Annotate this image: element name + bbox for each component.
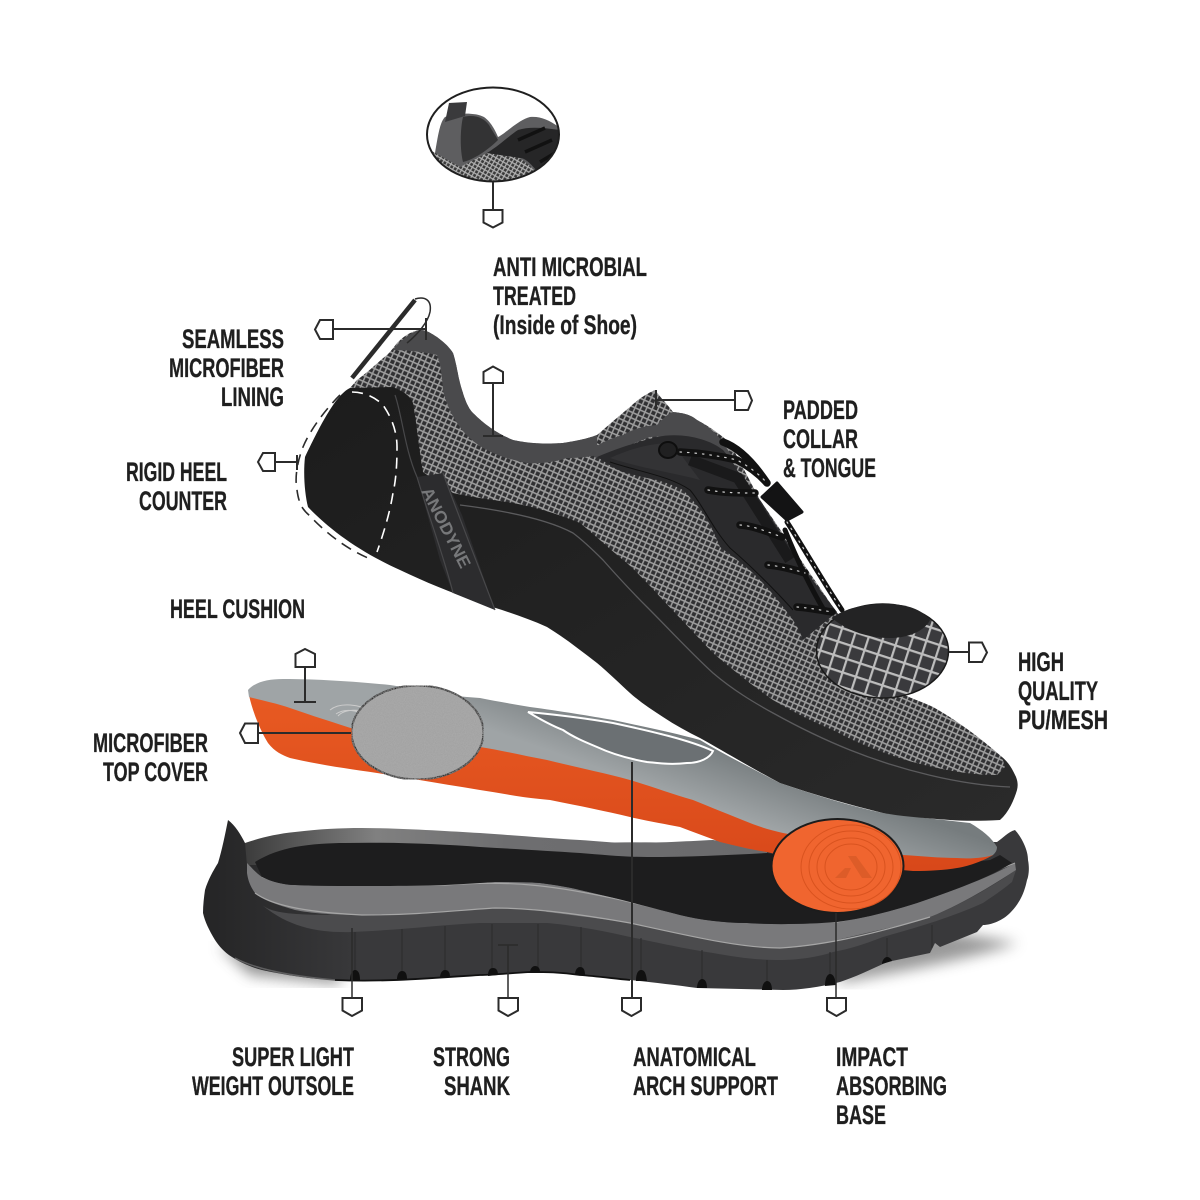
tread notches: [350, 957, 892, 990]
tag: heel cushion: [294, 649, 316, 702]
label: microfiber top cover: [93, 728, 208, 787]
tag: outsole: [342, 928, 362, 1016]
base logo: [835, 856, 872, 878]
inset heel tab: [445, 102, 467, 122]
label: seamless microfiber lining: [169, 324, 284, 412]
label: anatomical arch support: ARCH SUPPORT: [633, 1071, 778, 1101]
tongue: [590, 412, 737, 463]
inset black panel: [487, 128, 560, 170]
label: rigid heel counter: RIGID HEEL: [126, 457, 227, 487]
infographic: shoe anatomy: [94, 86, 1107, 1124]
textured rim: [262, 870, 1016, 960]
ripple rings: [801, 825, 901, 909]
tag: arch support: [622, 998, 641, 1016]
tag: impact base: [827, 913, 846, 1016]
arch support outline: [528, 712, 713, 764]
label: strong shank: SHANK: [444, 1071, 510, 1101]
label: high quality pu/mesh: PU/MESH: [1018, 705, 1108, 735]
label: super light weight outsole: WEIGHT OUTSOLE: [192, 1071, 354, 1101]
line: arch support: [631, 762, 633, 997]
inset mesh: [432, 151, 534, 180]
grey midsole band: [247, 863, 1016, 948]
label: seamless microfiber lining: LINING: [221, 382, 284, 412]
tag: seamless lining: [315, 318, 426, 340]
black cords: [680, 442, 832, 612]
outsole tread body: [203, 820, 1029, 990]
label: high quality pu/mesh: HIGH: [1018, 647, 1064, 677]
label: impact absorbing base: [836, 1042, 947, 1130]
tag: shank: [498, 945, 518, 1016]
shoe sole and rand: [304, 387, 1018, 821]
label: anti microbial: TREATED: [493, 281, 576, 311]
eyelet panel: [597, 435, 837, 640]
inset outer shoe: [435, 114, 558, 170]
label: anti microbial: (Inside of Shoe): [493, 310, 637, 340]
label: heel cushion: HEEL CUSHION: [170, 594, 305, 624]
outsole: [203, 820, 1029, 990]
eyelet panel shine: [610, 443, 700, 480]
label: impact absorbing base: ABSORBING: [836, 1071, 947, 1101]
insole orange side: [249, 695, 993, 871]
mesh upper: [350, 330, 1016, 800]
tread bottom edge: [335, 972, 630, 981]
mesh circle: [816, 604, 948, 698]
label: strong shank: [433, 1042, 510, 1101]
mesh circle leather: [832, 604, 930, 638]
outsole toe shadow: [835, 930, 1018, 984]
label: high quality pu/mesh: QUALITY: [1018, 676, 1098, 706]
label: strong shank: STRONG: [433, 1042, 510, 1072]
insole top surface: [248, 679, 997, 858]
label: microfiber top cover: MICROFIBER: [93, 728, 208, 758]
heel logo mark: [330, 705, 372, 716]
label: super light weight outsole: [192, 1042, 354, 1101]
reflective flecks: [680, 452, 842, 612]
label: anatomical arch support: [633, 1042, 778, 1101]
rand highlight: [460, 505, 1010, 787]
panel seam: [610, 462, 793, 610]
label: high quality pu/mesh: [1018, 647, 1108, 735]
label: impact absorbing base: IMPACT: [836, 1042, 908, 1072]
label: impact absorbing base: BASE: [836, 1100, 886, 1130]
tag: anti microbial lining: [483, 366, 503, 436]
label: seamless microfiber lining: SEAMLESS: [182, 324, 284, 354]
label: padded collar and tongue: & TONGUE: [783, 453, 876, 483]
callout: mesh detail: [816, 604, 948, 698]
lace toggle: [762, 483, 802, 520]
heel counter outline: [296, 392, 397, 558]
lace channel: [690, 460, 790, 560]
callout: anti microbial inset: [427, 88, 565, 190]
band highlight lines: [255, 863, 1015, 948]
logo strip: [417, 473, 495, 610]
eyelet: [659, 442, 677, 458]
label: anti microbial: [493, 252, 647, 340]
label: rigid heel counter: COUNTER: [139, 486, 227, 516]
label: seamless microfiber lining: MICROFIBER: [169, 353, 284, 383]
label: rigid heel counter: [126, 457, 227, 516]
label: super light weight outsole: SUPER LIGHT: [232, 1042, 354, 1072]
label: anti microbial: ANTI MICROBIAL: [493, 252, 647, 282]
tag: rigid heel counter: [258, 453, 297, 471]
insole: [248, 679, 997, 871]
inset laces: [518, 128, 560, 162]
black footbed cavity: [255, 843, 1012, 924]
label: microfiber top cover: TOP COVER: [103, 757, 208, 787]
outsole heel shadow: [218, 945, 340, 984]
tag: high quality mesh: [949, 642, 987, 662]
back wall: [245, 828, 767, 865]
callout: impact absorbing base: [772, 819, 904, 913]
shoe: [304, 330, 1018, 821]
heel pull loop: [352, 298, 430, 378]
tag: microfiber top cover: [240, 724, 351, 743]
label: padded collar and tongue: COLLAR: [783, 424, 858, 454]
tag: anti microbial inset: [484, 182, 502, 228]
tag: padded collar: [656, 390, 752, 410]
laces: [680, 442, 842, 612]
inset lining: [461, 116, 498, 162]
heel bottom edge highlight: [235, 958, 335, 980]
outer dashed line: [296, 395, 368, 558]
tread grooves: [355, 924, 932, 985]
inset ring: [427, 88, 559, 182]
label: padded collar and tongue: [783, 395, 876, 483]
label: padded collar and tongue: PADDED: [783, 395, 858, 425]
padded collar: [393, 330, 597, 463]
heel panel seam: [395, 395, 495, 610]
callout: microfiber top cover: [352, 686, 484, 780]
logo text: ANODYNE: [417, 484, 474, 571]
label: anatomical arch support: ANATOMICAL: [633, 1042, 756, 1072]
inner dashed line: [352, 392, 397, 552]
